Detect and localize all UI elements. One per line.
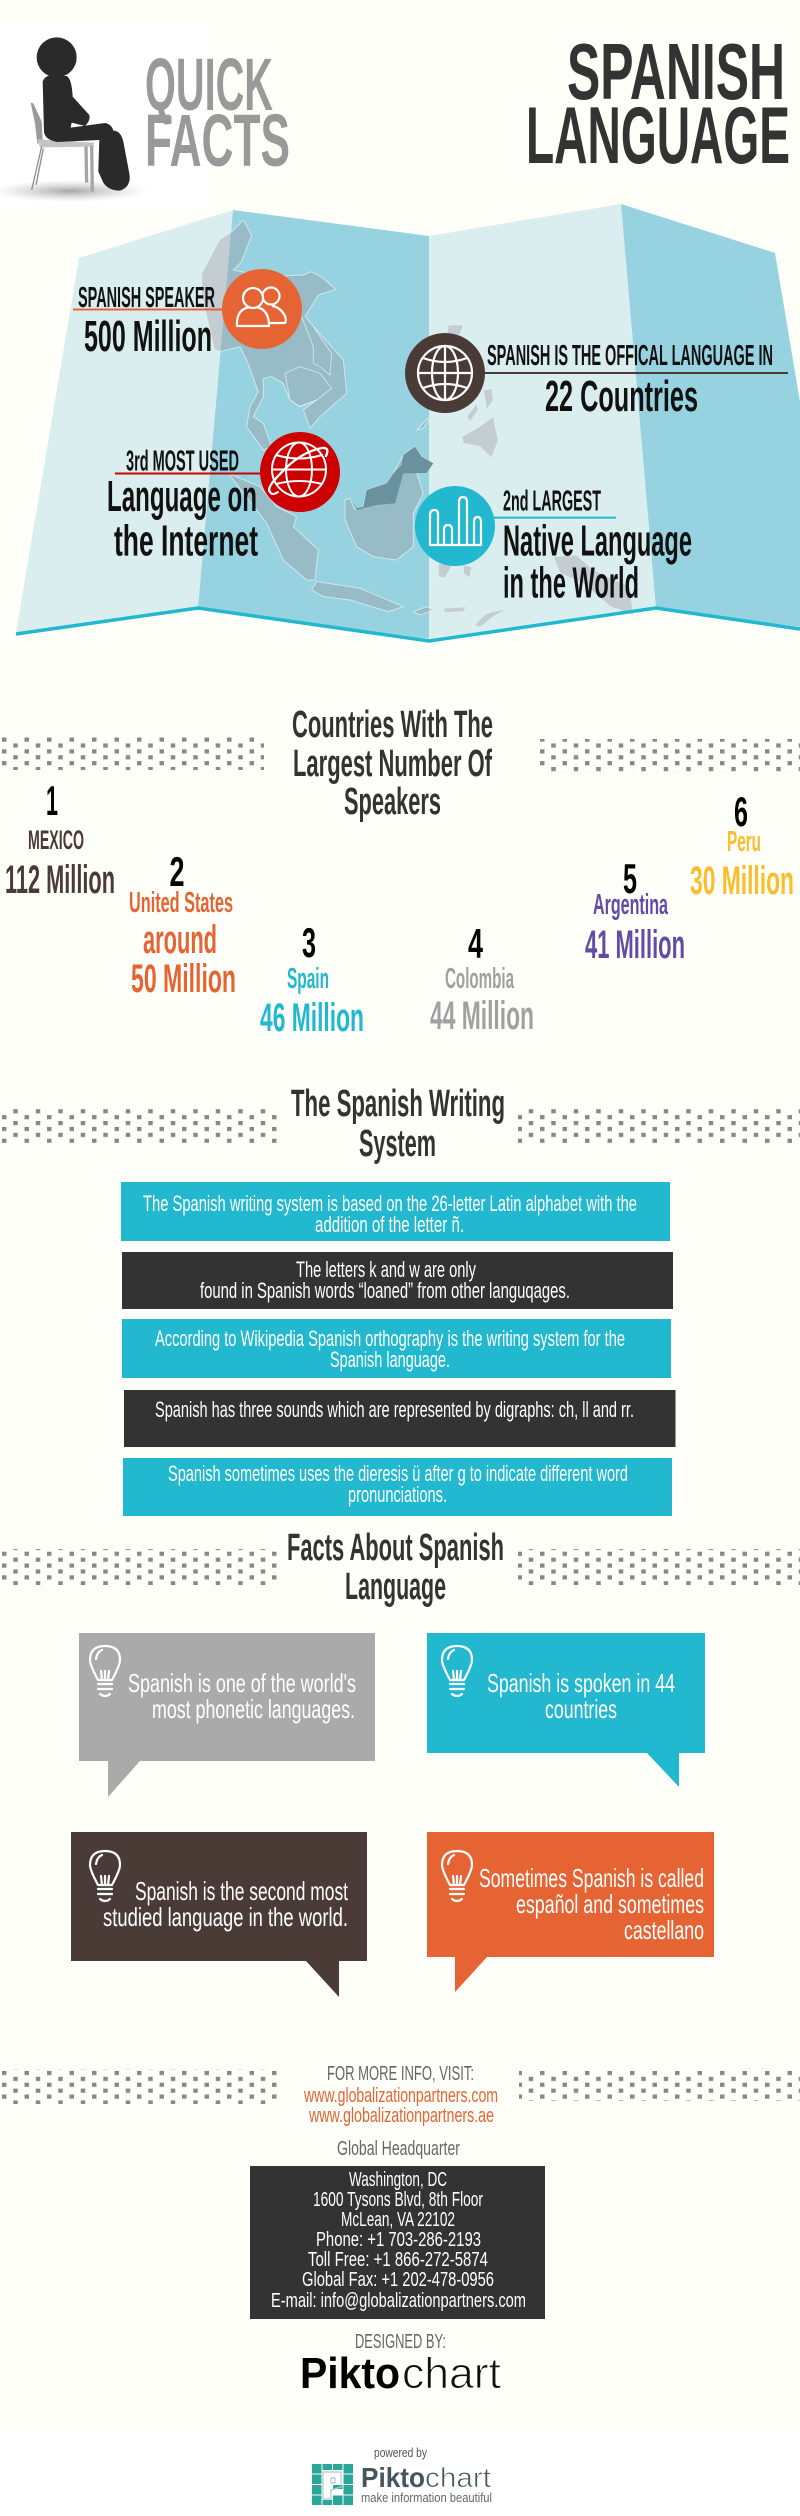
- country 5: argentina: [585, 855, 685, 967]
- speech bubble: most phonetic languages: Spanish is one of the world's: [128, 1668, 356, 1698]
- heading: quick facts: FACTS: [145, 99, 290, 182]
- speech bubble: español and castellano: [427, 1832, 714, 1992]
- writing fact 3: [122, 1319, 671, 1378]
- stat: second largest native language: [415, 486, 692, 608]
- country 3: spain: 3: [302, 919, 316, 966]
- heading: quick facts: [145, 43, 290, 182]
- country 4: colombia: [430, 920, 534, 1038]
- writing fact 1: [121, 1182, 670, 1241]
- stat: spanish speakers: [73, 269, 302, 361]
- country 2: united states: 2: [170, 848, 184, 895]
- writing fact 5: [123, 1458, 672, 1516]
- panel: headquarters contact: Washington, DC: [349, 2169, 447, 2191]
- country 6: peru: Peru: [727, 826, 761, 858]
- country 1: mexico: 112 Million: [5, 858, 115, 902]
- country 5: argentina: 5: [623, 855, 637, 902]
- panel: headquarters contact: 1600 Tysons Blvd, 8th Floor: [313, 2189, 483, 2211]
- country 6: peru: [690, 788, 794, 903]
- speech bubble: second most studied: studied language in the world.: [103, 1902, 348, 1932]
- panel: headquarters contact: Global Fax: +1 202-478-0956: [302, 2269, 494, 2291]
- country 3: spain: [260, 919, 364, 1040]
- heading: the spanish writing system: System: [359, 1123, 436, 1165]
- writing fact 2: [122, 1252, 673, 1309]
- icon: light bulb: [90, 1851, 120, 1901]
- speech bubble: spoken in 44 countries: countries: [545, 1694, 617, 1724]
- footer: more info links: FOR MORE INFO, VISIT:: [327, 2063, 474, 2085]
- designed by piktochart: [300, 2331, 501, 2398]
- powered by piktochart logo: chart: [425, 2462, 491, 2493]
- heading: quick facts: QUICK: [145, 43, 273, 126]
- stat: third most used on the internet: [107, 432, 340, 566]
- stat: third most used on the internet: Language on: [107, 472, 257, 521]
- country 5: argentina: 41 Million: [585, 923, 685, 967]
- heading: facts about spanish language: [2, 1527, 800, 1608]
- folded map background: [16, 204, 800, 641]
- icon: light bulb: [90, 1646, 120, 1696]
- footer: more info links: [2, 2063, 800, 2160]
- speech bubble: most phonetic languages: most phonetic languages.: [152, 1694, 355, 1724]
- header: seated figure illustration: [0, 25, 208, 205]
- icon: light bulb: [442, 1646, 472, 1696]
- stat: spanish speakers: SPANISH SPEAKER: [78, 282, 215, 314]
- powered by piktochart logo: Pikto: [361, 2462, 425, 2493]
- designed by piktochart: chart: [402, 2349, 501, 2398]
- country 3: spain: 46 Million: [260, 996, 364, 1040]
- country 3: spain: Spain: [287, 963, 329, 995]
- stat: spanish speakers: 500 Million: [84, 312, 212, 361]
- heading: the spanish writing system: The Spanish Writing: [291, 1083, 505, 1125]
- writing fact 1: addition of the letter ñ.: [315, 1212, 464, 1237]
- stat: third most used on the internet: 3rd MOST USED: [126, 446, 239, 478]
- footer: more info links: www.globalizationpartners.com: [303, 2085, 498, 2107]
- designed by piktochart: Pikto: [300, 2349, 400, 2398]
- country 4: colombia: 44 Million: [430, 994, 534, 1038]
- icon: light bulb: [442, 1851, 472, 1901]
- writing fact 2: found in Spanish words “loaned” from other languqages.: [200, 1278, 570, 1303]
- writing fact 2: The letters k and w are only: [296, 1257, 476, 1282]
- heading: the spanish writing system: [2, 1083, 800, 1165]
- panel: headquarters contact: Toll Free: +1 866-272-5874: [308, 2249, 488, 2271]
- heading: countries with the largest number of speakers: Largest Number Of: [293, 743, 492, 785]
- heading: facts about spanish language: Facts About Spanish: [287, 1527, 504, 1569]
- powered by piktochart logo: [312, 2445, 492, 2505]
- country 4: colombia: 4: [468, 920, 483, 967]
- heading: countries with the largest number of speakers: [2, 704, 800, 823]
- country 6: peru: 6: [734, 788, 748, 835]
- panel: headquarters contact: [250, 2166, 545, 2319]
- speech bubble: most phonetic languages: [79, 1633, 375, 1797]
- country 4: colombia: Colombia: [445, 963, 514, 995]
- writing fact 5: pronunciations.: [348, 1482, 447, 1507]
- country 2: united states: 50 Million: [131, 957, 236, 1001]
- stat: official language countries: [405, 333, 788, 421]
- panel: headquarters contact: McLean, VA 22102: [341, 2209, 455, 2231]
- speech bubble: second most studied: Spanish is the second most: [135, 1876, 349, 1906]
- designed by piktochart: DESIGNED BY:: [355, 2331, 446, 2353]
- writing fact 3: Spanish language.: [330, 1347, 450, 1372]
- powered by piktochart logo: powered by: [374, 2445, 427, 2460]
- country 2: united states: United States: [129, 887, 233, 919]
- stat: third most used on the internet: the Internet: [114, 516, 258, 566]
- country 5: argentina: Argentina: [593, 889, 668, 921]
- heading: countries with the largest number of speakers: Speakers: [344, 781, 441, 823]
- speech bubble: spoken in 44 countries: [427, 1633, 705, 1787]
- powered by piktochart logo: make information beautiful: [361, 2491, 492, 2505]
- heading: countries with the largest number of speakers: Countries With The: [292, 704, 493, 746]
- footer: more info links: Global Headquarter: [337, 2138, 460, 2160]
- writing fact 4: [124, 1390, 676, 1447]
- country 2: united states: [129, 848, 236, 1001]
- country 1: mexico: [5, 777, 115, 902]
- speech bubble: second most studied: [71, 1832, 367, 1997]
- panel: headquarters contact: Phone: +1 703-286-2193: [316, 2229, 481, 2251]
- stat: second largest native language: in the World: [503, 559, 639, 608]
- country 2: united states: around: [143, 918, 217, 962]
- panel: headquarters contact: E-mail: info@globalizationpartners.com: [271, 2290, 526, 2312]
- country 1: mexico: MEXICO: [28, 825, 84, 855]
- footer: more info links: www.globalizationpartners.ae: [308, 2105, 494, 2127]
- speech bubble: spoken in 44 countries: Spanish is spoken in 44: [487, 1668, 675, 1698]
- speech bubble: español and castellano: español and sometimes: [516, 1889, 704, 1919]
- stat: second largest native language: 2nd LARGEST: [503, 486, 601, 518]
- country 1: mexico: 1: [46, 777, 58, 824]
- title: spanish language: [526, 27, 790, 181]
- speech bubble: español and castellano: castellano: [624, 1915, 704, 1945]
- heading: facts about spanish language: Language: [345, 1566, 446, 1608]
